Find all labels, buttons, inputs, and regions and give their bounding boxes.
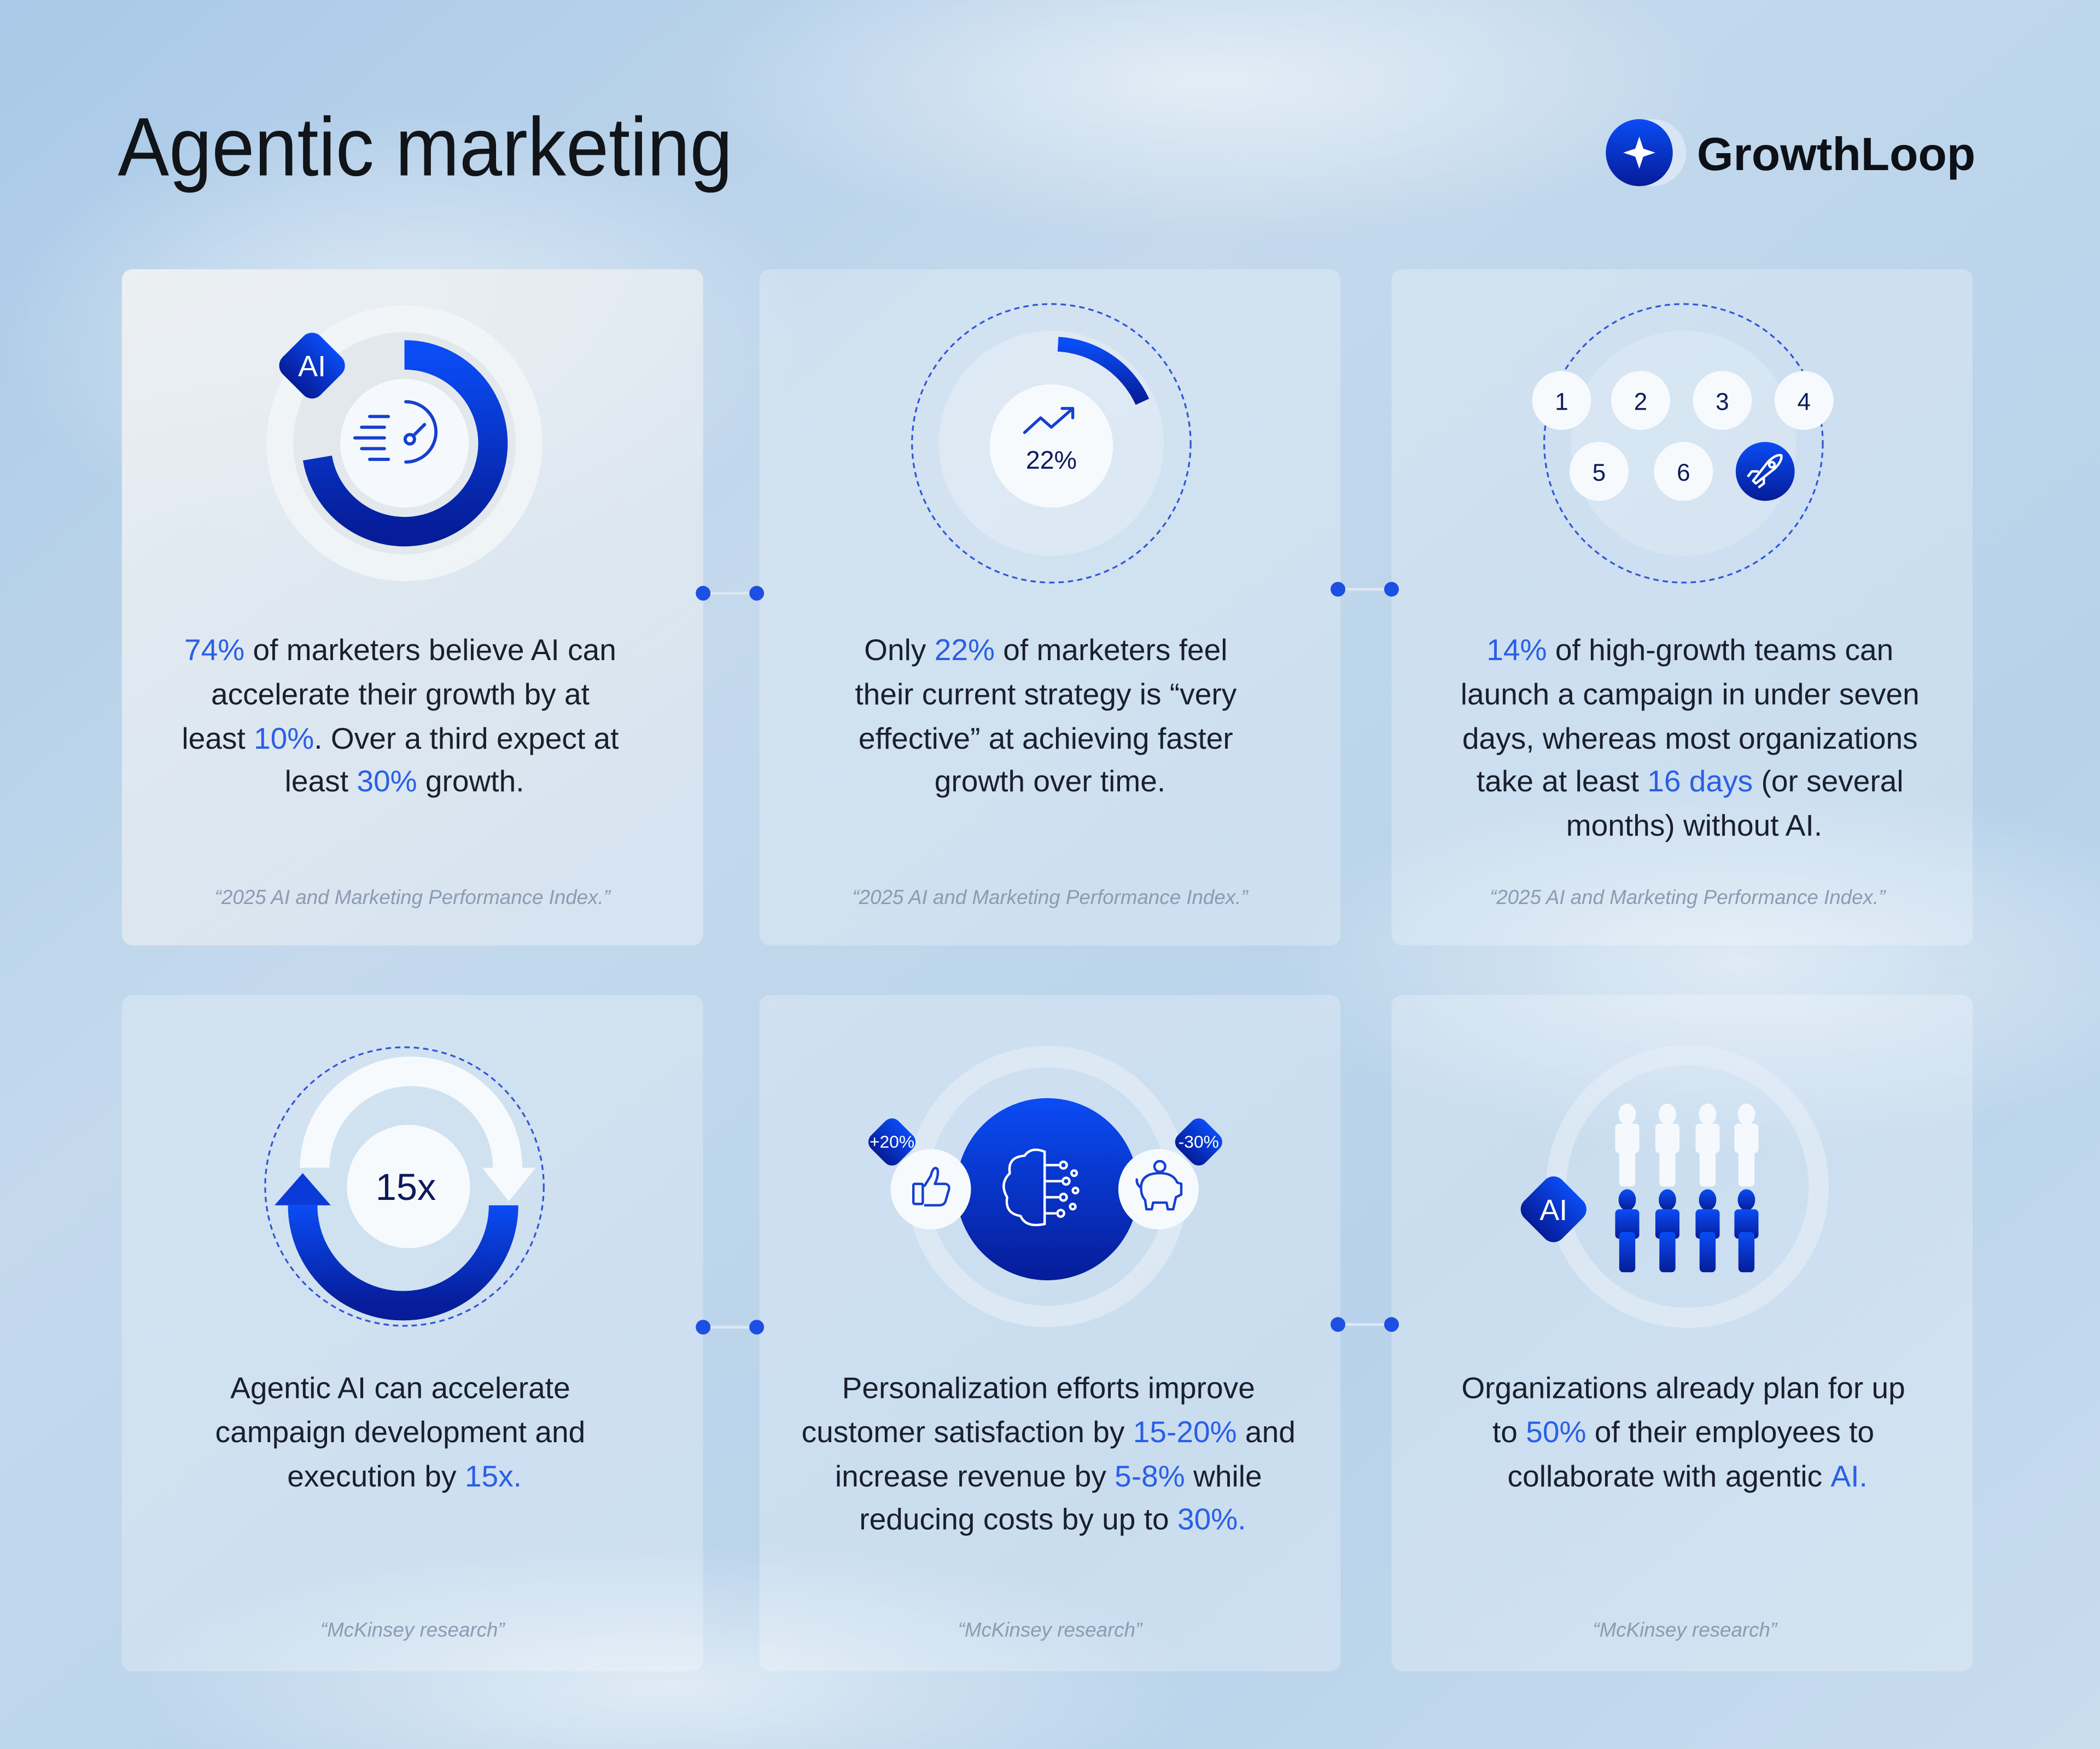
icon: AI badge: AI	[298, 350, 326, 383]
text block: customer satisfaction by 15-20% and	[802, 1415, 1296, 1449]
logo: GrowthLoop	[1606, 119, 1975, 186]
text block: Personalization efforts improve	[842, 1371, 1255, 1404]
text block: launch a campaign in under seven	[1461, 677, 1920, 711]
panel: 74% growth	[122, 269, 703, 946]
title: Agentic marketing	[118, 101, 733, 194]
icon: brain with badges: +20%	[870, 1132, 914, 1152]
text block: days, whereas most organizations	[1462, 721, 1918, 755]
icon: cycle arrows: 15x	[376, 1166, 436, 1208]
text block: their current strategy is “very	[855, 677, 1237, 711]
text block: execution by 15x.	[287, 1459, 522, 1493]
connector: card4-card5	[696, 1320, 764, 1334]
icon: cycle arrows	[265, 1047, 544, 1326]
icon: numbered steps: 5	[1592, 459, 1606, 486]
panel: personalization	[760, 995, 1340, 1671]
icon: numbered steps: 6	[1677, 459, 1690, 486]
text block: effective” at achieving faster	[859, 721, 1233, 755]
source: “2025 AI and Marketing Performance Index.”	[852, 886, 1249, 908]
text block: growth over time.	[935, 764, 1165, 798]
icon: brain with badges	[865, 1057, 1226, 1316]
icon: people with AI: AI	[1539, 1194, 1567, 1227]
text block: collaborate with agentic AI.	[1508, 1459, 1868, 1493]
text block: 14% of high-growth teams can	[1486, 633, 1893, 667]
panel: 14% launch	[1391, 269, 1973, 946]
icon: numbered steps: 4	[1798, 388, 1811, 415]
panel: 15x	[122, 995, 703, 1671]
text block: 74% of marketers believe AI can	[184, 633, 616, 667]
text block: Organizations already plan for up	[1461, 1371, 1905, 1404]
text block: reducing costs by up to 30%.	[859, 1502, 1246, 1536]
text block: months) without AI.	[1566, 808, 1822, 842]
connector: card1-card2	[696, 586, 764, 601]
logo: GrowthLoop: GrowthLoop	[1697, 128, 1975, 180]
icon: numbered steps: 2	[1634, 388, 1647, 415]
text block: to 50% of their employees to	[1492, 1415, 1874, 1449]
text block: take at least 16 days (or several	[1477, 764, 1904, 798]
panel: 50% employees	[1391, 995, 1973, 1671]
icon: numbered steps: 1	[1555, 388, 1568, 415]
icon: numbered steps: 3	[1716, 388, 1729, 415]
icon: AI badge	[274, 328, 350, 404]
text block: Agentic AI can accelerate	[230, 1371, 570, 1404]
icon: numbered steps	[1532, 304, 1834, 582]
connector: card2-card3	[1331, 582, 1399, 597]
icon: brain with badges: -30%	[1179, 1132, 1219, 1152]
icon: speed ring	[266, 305, 542, 581]
source: “McKinsey research”	[958, 1618, 1143, 1641]
icon: progress gauge	[912, 304, 1191, 582]
source: “2025 AI and Marketing Performance Index.”	[1490, 886, 1886, 908]
icon: people with AI	[1516, 1056, 1819, 1318]
source: “McKinsey research”	[1592, 1618, 1778, 1641]
text block: campaign development and	[215, 1415, 585, 1449]
text block: increase revenue by 5-8% while	[835, 1459, 1262, 1493]
source: “McKinsey research”	[320, 1618, 505, 1641]
icon: progress gauge: 22%	[1026, 446, 1077, 474]
panel: 22% effective	[760, 269, 1340, 946]
source: “2025 AI and Marketing Performance Index.”	[215, 886, 611, 908]
connector: card5-card6	[1331, 1317, 1399, 1332]
text block: least 10%. Over a third expect at	[182, 721, 619, 755]
text block: Only 22% of marketers feel	[864, 633, 1228, 667]
text block: accelerate their growth by at	[211, 677, 590, 711]
text block: least 30% growth.	[285, 764, 524, 798]
